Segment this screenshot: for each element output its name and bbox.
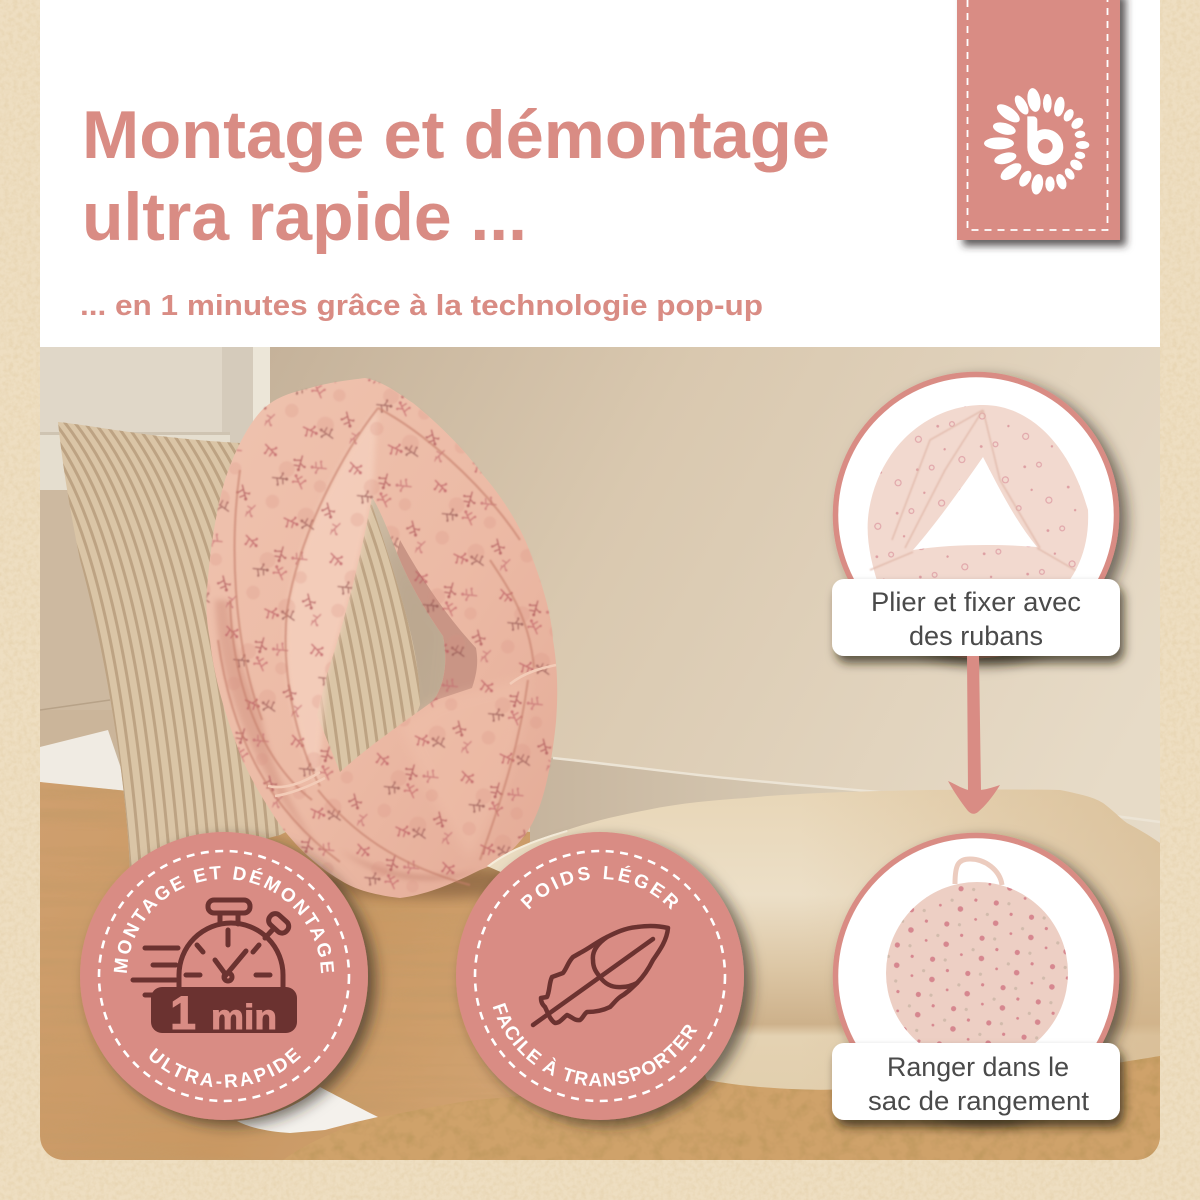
icon: feather [533,926,668,1025]
step circle: folded scarf [836,374,1116,656]
badge text bottom: FACILE À TRANSPORTER [492,1002,698,1086]
jute rug [283,1056,1160,1160]
baseboards [40,730,1160,842]
striped pillow [58,422,420,867]
shadow under scarf [322,866,500,904]
step circle: storage bag [836,836,1116,1116]
timer value: 1 [170,986,196,1039]
label: ranger: sac de rangement [868,1086,1090,1116]
badge text top: POIDS LÉGER [520,866,678,910]
timer plate [151,987,297,1033]
label: ranger [832,1043,1120,1120]
scarf shading [214,415,482,882]
wall [40,347,1160,847]
arrow: down [948,656,1000,814]
photo scene [0,347,1160,1160]
title: Montage et démontage [82,97,830,173]
label: ranger: Ranger dans le [887,1052,1069,1082]
wall panel [40,347,270,750]
folded scarf photo [868,405,1088,590]
tag ribbon [957,0,1120,240]
icon: sunflower logo [984,87,1089,195]
badge text top: MONTAGE ET DÉMONTAGE [114,866,334,974]
storage bag photo [886,859,1068,1064]
title [82,97,830,255]
label: plier: des rubans [909,621,1043,651]
badge text bottom: ULTRA-RAPIDE [150,1047,301,1088]
scarf floral print [206,378,557,898]
timer value: min [211,998,277,1037]
scarf ring [206,378,557,898]
white header panel [40,0,1160,347]
title: ultra rapide ... [82,179,527,255]
wood floor [40,782,1160,1160]
white tassel [237,1087,378,1133]
icon: stopwatch [133,900,297,1033]
badge: poids léger [454,828,762,1136]
label: plier: Plier et fixer avec [871,587,1081,617]
subtitle: ... en 1 minutes grâce à la technologie pop-up [80,290,763,322]
badge: montage [78,828,386,1136]
label: plier [832,579,1120,656]
scarf ties [268,665,556,796]
wall shadow behind scarf [384,536,446,712]
scarf folds [218,408,534,885]
brand tag with logo [957,0,1120,240]
timer value [170,986,277,1039]
floor cushion [480,780,1160,1100]
